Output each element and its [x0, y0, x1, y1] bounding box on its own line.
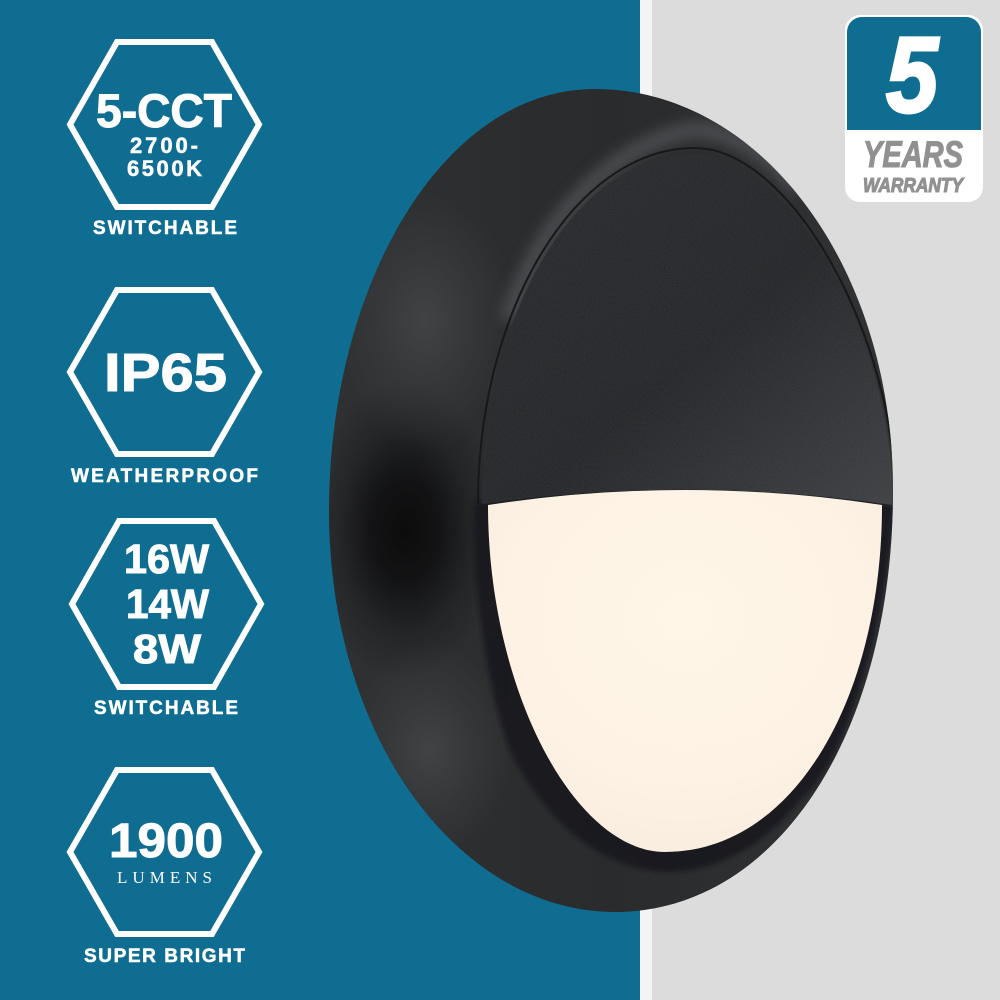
feature: 1900 lumens: [70, 770, 259, 967]
icon: hexagon wattage: [72, 521, 261, 687]
label: switchable: SWITCHABLE: [94, 698, 238, 719]
feature: wattage switchable: [72, 521, 261, 719]
body shading: [310, 130, 896, 872]
text: 6500K: 6500K: [127, 156, 202, 181]
label: super bright: SUPER BRIGHT: [84, 946, 245, 967]
lamp body: [329, 89, 893, 912]
text: 2700-: 2700-: [130, 133, 198, 158]
text: 8W: 8W: [133, 626, 201, 672]
heading: IP65: IP65: [104, 343, 227, 403]
badge background: [845, 15, 983, 202]
opal lens: [488, 490, 882, 852]
product photo: wall light: [310, 89, 896, 912]
text: warranty: WARRANTY: [863, 175, 964, 197]
text: years: YEARS: [863, 134, 963, 175]
heading: 5-CCT: 5-CCT: [96, 84, 232, 137]
feature: 5-CCT switchable: [70, 42, 259, 239]
eyelid cap: [482, 154, 893, 505]
text: lumens: LUMENS: [117, 868, 212, 887]
icon: hexagon 5-CCT: [70, 42, 259, 207]
cap grain texture: [480, 150, 895, 510]
feature: IP65 weatherproof: [70, 290, 259, 487]
warranty badge: [845, 14, 983, 202]
icon: hexagon IP65: [70, 290, 259, 454]
text: 16W: 16W: [124, 536, 209, 582]
badge blue header: [847, 17, 981, 130]
panel: blue feature column: [0, 0, 640, 1000]
heading: 1900: 1900: [109, 815, 223, 868]
icon: hexagon lumens: [70, 770, 259, 934]
lens bezel: [474, 480, 893, 872]
white divider stripe: [640, 0, 652, 1000]
text: 14W: 14W: [126, 581, 209, 627]
number 5: 5: [886, 14, 940, 135]
label: weatherproof: WEATHERPROOF: [71, 466, 258, 487]
label: switchable: SWITCHABLE: [93, 218, 237, 239]
